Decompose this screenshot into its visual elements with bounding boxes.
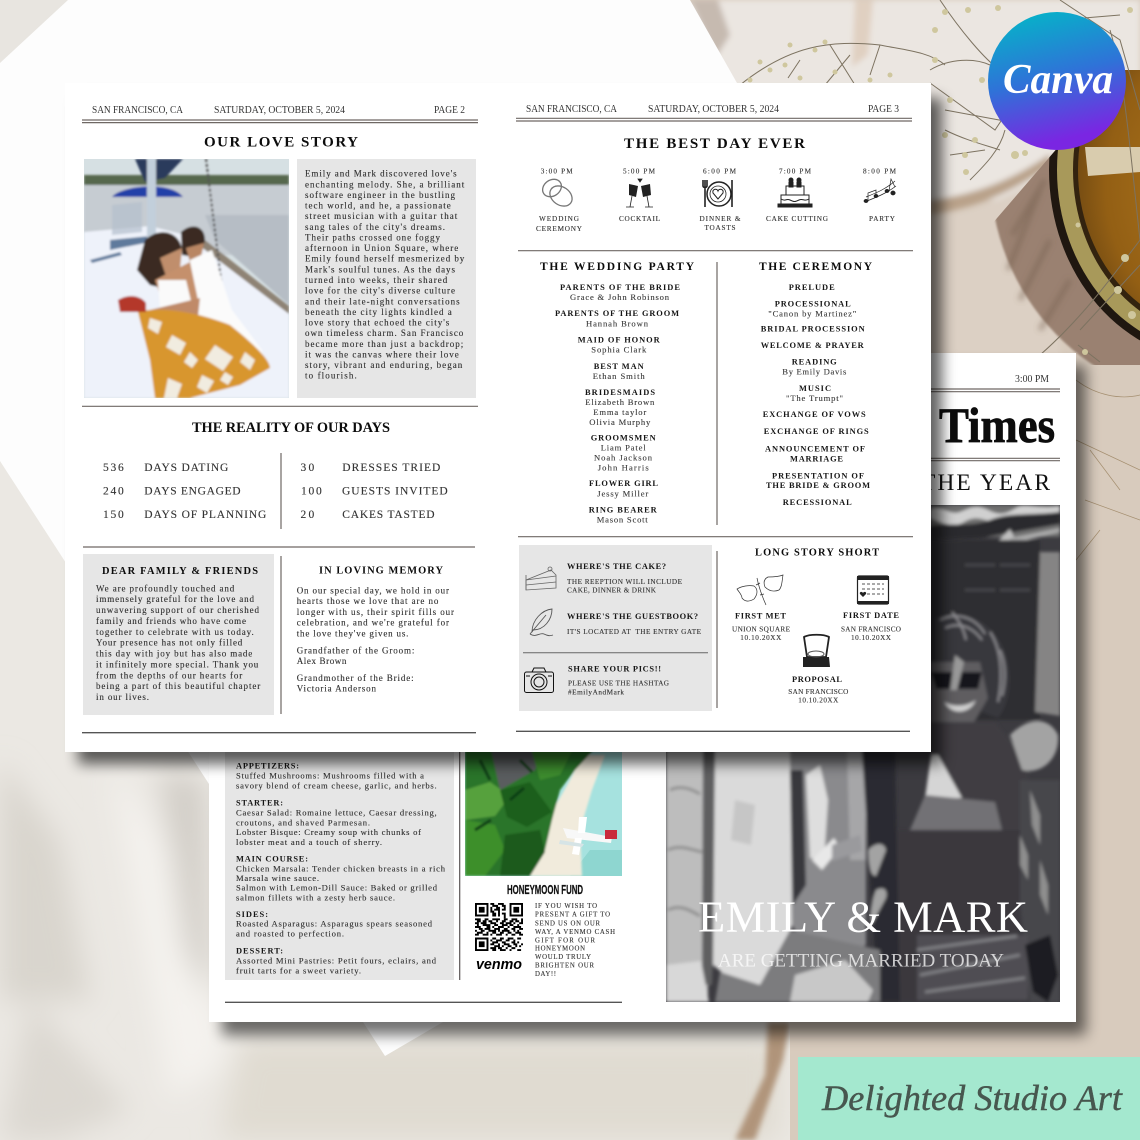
icon: plate with heart [703, 180, 732, 207]
icon: wedding cake [778, 178, 812, 207]
honeymoon fund text: PRESENT A GIFT TO [535, 912, 610, 919]
venmo logo: venmo [476, 957, 522, 973]
in loving memory: Grandmother of the Bride: [297, 673, 414, 683]
ceremony column: THE CEREMONY [759, 261, 873, 273]
long story short panel: 10.10.20XX [851, 634, 892, 642]
photo: man jacket [666, 750, 708, 1002]
ceremony column: "Canon by Martinez" [768, 309, 856, 319]
timeline: wedding ceremony: WEDDING [539, 215, 579, 223]
in loving memory: On our special day, we hold in our [297, 585, 449, 595]
photo: trousers and hands [715, 930, 880, 1002]
timeline: party: 8:00 PM [863, 168, 897, 176]
honeymoon fund text: WOULD TRULY [535, 954, 591, 961]
page 3 header: SAN FRANCISCO, CA [526, 104, 617, 115]
timeline: cake cutting: CAKE CUTTING [766, 215, 828, 223]
guest info panel: THE REEPTION WILL INCLUDE [567, 578, 683, 586]
long story short panel: SAN FRANCISCO [788, 688, 848, 696]
timeline: dinner and toasts [700, 168, 741, 232]
timeline: wedding ceremony: 3:00 PM [541, 168, 573, 176]
ceremony column: READING [792, 358, 837, 367]
in loving memory [297, 566, 454, 694]
photo: roof tiles [931, 505, 1060, 543]
menu panel: MAIN COURSE: [236, 854, 308, 863]
studio credit banner: Delighted Studio Art [821, 1078, 1123, 1118]
Canva badge: Canva [1003, 57, 1113, 103]
icon: ring box [803, 635, 830, 667]
long story short panel: PROPOSAL [792, 675, 842, 684]
front spread: white sheet [65, 83, 931, 752]
long story short panel: 10.10.20XX [740, 634, 782, 642]
dried flower branches [740, 0, 1140, 560]
page 2 header: SATURDAY, OCTOBER 5, 2024 [214, 105, 346, 116]
in loving memory: Victoria Anderson [297, 684, 376, 694]
stats right column: GUESTS INVITED [342, 486, 448, 498]
long story short panel: FIRST DATE [843, 611, 899, 620]
photo: food tray [118, 296, 146, 312]
island photo with seaplane [465, 745, 622, 880]
wedding party column: Emma taylor [593, 407, 646, 417]
studio credit banner [798, 1057, 1140, 1140]
love story text panel: Their paths crossed one foggy [305, 232, 440, 242]
masthead subtitle: THE YEAR [921, 470, 1050, 496]
menu panel: Roasted Asparagus: Asparagus spears seasoned [236, 919, 433, 929]
in loving memory: the love they've given us. [297, 628, 408, 638]
dear family panel: DEAR FAMILY & FRIENDS [102, 566, 258, 577]
long story short panel: LONG STORY SHORT [755, 548, 879, 559]
menu panel: Caesar Salad: Romaine lettuce, Caesar dressing, [236, 808, 437, 818]
background: cloth corner top left [0, 0, 70, 70]
love story text panel: sang tales of the city's dreams. [305, 222, 445, 232]
front spread drop shadow [78, 98, 942, 764]
guest info panel: PLEASE USE THE HASHTAG [568, 680, 669, 688]
timeline: party [863, 168, 897, 223]
icon: wedding rings [539, 176, 576, 210]
stats right column: 20 [300, 509, 314, 521]
dear family panel: it infinitely more special. Thank you [96, 659, 259, 669]
menu panel: SIDES: [236, 910, 268, 919]
wedding party column: Noah Jackson [594, 453, 653, 463]
love story text panel: story, vibrant and enduring, began [305, 360, 463, 370]
honeymoon fund text [535, 903, 615, 978]
ceremony column: MARRIAGE [790, 454, 843, 463]
dried flower buds [748, 5, 1136, 355]
ceremony column: RECESSIONAL [783, 498, 852, 507]
stats right column [300, 462, 448, 521]
ceremony column: "The Trumpt" [786, 393, 843, 403]
guest info panel: IT'S LOCATED AT THE ENTRY GATE [567, 628, 702, 636]
background: draped cloth top right [690, 0, 1140, 360]
love story text panel: Emily found herself mesmerized by [305, 254, 465, 264]
menu panel: APPETIZERS: [236, 761, 299, 770]
photo: deck [84, 226, 289, 398]
background: white satin cloth bottom left [0, 440, 790, 1140]
stats right column: CAKES TASTED [342, 509, 435, 521]
icon: cake slice [526, 567, 556, 590]
ceremony column: BRIDAL PROCESSION [761, 324, 865, 333]
stats left column: DAYS DATING [144, 462, 228, 474]
menu panel: Stuffed Mushrooms: Mushrooms filled with a [236, 770, 424, 780]
wedding party column: Ethan Smith [593, 371, 645, 381]
love story text panel: own timeless charm. San Francisco [305, 328, 464, 338]
dear family panel [83, 554, 274, 715]
timeline: party: PARTY [869, 215, 896, 223]
honeymoon fund text: HONEYMOON [535, 946, 585, 953]
page 3 header: SATURDAY, OCTOBER 5, 2024 [648, 104, 780, 115]
icon: camera [524, 668, 554, 692]
guest info panel: SHARE YOUR PICS!! [568, 664, 661, 673]
heading: our love story: OUR LOVE STORY [204, 135, 358, 151]
page 2 header: SAN FRANCISCO, CA [92, 105, 183, 116]
stats right column: 30 [300, 462, 314, 474]
dear family panel: being a part of this beautiful chapter [96, 681, 260, 691]
ceremony column: PROCESSIONAL [775, 300, 851, 309]
love story text panel: tech world, and he, a passionate [305, 201, 451, 211]
menu panel: Salmon with Lemon-Dill Sauce: Baked or grilled [236, 883, 438, 893]
dear family panel: Your presence has not only filled [96, 638, 243, 648]
love story text panel: to flourish. [305, 371, 357, 381]
wedding party column: BEST MAN [594, 362, 644, 371]
ceremony column: THE BRIDE & GROOM [766, 481, 870, 490]
love story text panel: and their late-night conversations [305, 296, 460, 306]
page 3 header: PAGE 3 [868, 104, 899, 115]
ceremony column: WELCOME & PRAYER [761, 341, 865, 350]
wedding party column: Mason Scott [597, 514, 648, 524]
menu panel: salmon fillets with a zesty herb sauce. [236, 893, 395, 903]
menu panel: and roasted to perfection. [236, 929, 344, 939]
dear family panel: family and friends who have come [96, 616, 246, 626]
menu panel: Chicken Marsala: Tender chicken breasts in a rich [236, 863, 446, 873]
love story text panel: Mark's soulful tunes. As the days [305, 264, 455, 274]
back page drop shadow [222, 365, 1086, 1035]
wedding party column: Elizabeth Brown [585, 397, 655, 407]
dear family panel: together to celebrate with us today. [96, 627, 254, 637]
ceremony column: EXCHANGE OF RINGS [764, 427, 869, 436]
long story short panel: SAN FRANCISCO [841, 626, 901, 634]
photo: woman [137, 232, 182, 290]
photo: woman torso [931, 722, 1030, 830]
honeymoon fund text: WAY, A VENMO CASH [535, 929, 615, 936]
dear family panel: immensely grateful for the love and [96, 594, 254, 604]
ceremony column: PRELUDE [789, 283, 835, 292]
ceremony column: MUSIC [799, 384, 831, 393]
menu panel: STARTER: [236, 799, 283, 808]
in loving memory: celebration, and we're grateful for [297, 618, 449, 628]
QR code [475, 903, 523, 951]
menu panel: Assorted Mini Pastries: Petit fours, eclairs, and [236, 955, 437, 965]
timeline: cocktail [619, 168, 660, 223]
back page: white sheet [209, 353, 1076, 1022]
menu panel: Lobster Bisque: Creamy soup with chunks of [236, 827, 421, 837]
stats left column [103, 462, 266, 521]
honeymoon fund text: GIFT FOR OUR [535, 937, 595, 944]
ceremony column: PRESENTATION OF [772, 471, 864, 480]
love story text panel: beneath the city lights kindled a [305, 307, 452, 317]
in loving memory: IN LOVING MEMORY [319, 566, 443, 577]
long story short panel: 10.10.20XX [798, 697, 839, 705]
guest info panel [519, 545, 712, 711]
love story text panel: turned into weeks, their shared [305, 275, 448, 285]
in loving memory: longer with us, their spirit fills our [297, 607, 454, 617]
sailboat couple photo [84, 159, 289, 398]
photo: man [181, 226, 205, 258]
wedding party column: Grace & John Robinson [570, 292, 670, 302]
honeymoon fund text: DAY!! [535, 971, 556, 978]
timeline: wedding ceremony: CEREMONY [536, 225, 583, 233]
wedding party column: GROOMSMEN [591, 434, 656, 443]
wedding party column: John Harris [598, 463, 649, 473]
icon: feather quill [530, 609, 553, 636]
long story short panel [732, 548, 901, 705]
cover names: EMILY & MARK [698, 892, 1028, 942]
timeline: dinner and toasts: DINNER & [700, 215, 741, 223]
dear family panel: We are profoundly touched and [96, 583, 235, 593]
menu panel: fruit tarts for a sweet variety. [236, 965, 361, 975]
wedding party column: PARENTS OF THE BRIDE [560, 283, 680, 292]
ceremony column: EXCHANGE OF VOWS [763, 410, 866, 419]
background: ceramic plate and amber glass [994, 70, 1140, 365]
timeline: cake cutting: 7:00 PM [779, 168, 812, 176]
ceremony column [759, 261, 873, 507]
stats right column: 100 [301, 486, 322, 498]
timeline: cocktail: COCKTAIL [619, 215, 660, 223]
masthead time: 3:00 PM [1015, 374, 1049, 385]
love story text panel: enchanting melody. She, a brilliant [305, 179, 465, 189]
dear family panel: in our lives. [96, 692, 149, 702]
icon: doves [737, 575, 783, 605]
cover subtitle: ARE GETTING MARRIED TODAY [718, 951, 1004, 972]
stats left column: 150 [103, 509, 124, 521]
menu panel [225, 745, 454, 980]
menu panel: croutons, and shaved Parmesan. [236, 817, 370, 827]
stats left column: 536 [103, 462, 124, 474]
back page masthead [225, 374, 1060, 496]
dear family panel: from the depths of our hearts for [96, 670, 242, 680]
heading: the reality of our days: THE REALITY OF OUR DAYS [192, 420, 390, 436]
timeline: cocktail: 5:00 PM [623, 168, 656, 176]
page 3 header [516, 104, 912, 121]
menu panel: savory blend of cream cheese, garlic, and herbs. [236, 780, 437, 790]
love story text panel: afternoon in Union Square, where [305, 243, 458, 253]
love story text panel: street musician with a guitar that [305, 211, 458, 221]
stats left column: DAYS OF PLANNING [144, 509, 266, 521]
black and white couple photo [666, 505, 1060, 1002]
love story text panel: software engineer in the bustling [305, 190, 456, 200]
heading: the best day ever: THE BEST DAY EVER [624, 136, 805, 152]
wedding party column: Jessy Miller [597, 488, 648, 498]
wedding party column [540, 261, 695, 524]
in loving memory: Grandfather of the Groom: [297, 645, 414, 655]
in loving memory: hearts those we love that are no [297, 596, 439, 606]
wedding party column: RING BEARER [589, 505, 658, 514]
timeline: dinner and toasts: 6:00 PM [703, 168, 737, 176]
honeymoon fund text: IF YOU WISH TO [535, 903, 597, 910]
honeymoon fund text: SEND US ON OUR [535, 920, 600, 927]
stats left column: 240 [103, 486, 124, 498]
ceremony column: By Emily Davis [782, 367, 847, 377]
page 2 header: PAGE 2 [434, 105, 465, 116]
photo: canopy and mast [112, 186, 183, 197]
wedding party column: Sophia Clark [591, 344, 647, 354]
wedding party column: FLOWER GIRL [589, 479, 658, 488]
menu panel: lobster meat and a touch of sherry. [236, 837, 382, 847]
icon: music notes [864, 179, 896, 203]
guest info panel: #EmilyAndMark [568, 688, 624, 696]
dear family panel: unwavering support of our cherished [96, 605, 260, 615]
in loving memory: Alex Brown [297, 656, 347, 666]
dear family panel: this day with joy but has also made [96, 648, 252, 658]
stats right column: DRESSES TRIED [342, 462, 440, 474]
page 2 header [82, 105, 478, 123]
wedding party column: MAID OF HONOR [578, 336, 661, 345]
wedding party column: BRIDESMAIDS [585, 388, 655, 397]
menu panel: Marsala wine sauce. [236, 873, 319, 883]
love story text panel: Emily and Mark discovered love's [305, 169, 457, 179]
Canva badge [988, 12, 1126, 150]
icon: champagne glasses [626, 179, 653, 207]
photo: woman hair and face [931, 612, 1009, 736]
love story text panel: it was the canvas where their love [305, 349, 459, 359]
wedding party column: Hannah Brown [586, 318, 649, 328]
ceremony column: ANNOUNCEMENT OF [765, 444, 865, 453]
long story short panel: UNION SQUARE [732, 626, 791, 634]
love story text panel: became more than just a backdrop; [305, 339, 463, 349]
guest info panel: CAKE, DINNER & DRINK [567, 587, 657, 595]
guest info panel: WHERE'S THE CAKE? [567, 562, 666, 571]
wedding party column: PARENTS OF THE GROOM [555, 309, 679, 318]
love story text panel: love story that echoed the city's [305, 318, 450, 328]
timeline: dinner and toasts: TOASTS [704, 224, 736, 232]
wedding party column: THE WEDDING PARTY [540, 261, 695, 273]
love story text panel [297, 159, 476, 398]
love story text panel: love for the city's diverse culture [305, 286, 455, 296]
photo: orange dress [138, 310, 270, 398]
timeline: cake cutting [766, 168, 828, 223]
wedding party column: Liam Patel [601, 442, 646, 452]
honeymoon fund heading: HONEYMOON FUND [507, 882, 583, 897]
stats left column: DAYS ENGAGED [144, 486, 241, 498]
icon: calendar [857, 576, 889, 604]
wedding party column: Olivia Murphy [589, 417, 651, 427]
masthead title: Times [939, 397, 1055, 453]
guest info panel: WHERE'S THE GUESTBOOK? [567, 612, 698, 621]
timeline: wedding ceremony [536, 168, 583, 233]
menu panel: DESSERT: [236, 947, 283, 956]
long story short panel: FIRST MET [735, 612, 786, 621]
honeymoon fund text: BRIGHTEN OUR [535, 963, 594, 970]
